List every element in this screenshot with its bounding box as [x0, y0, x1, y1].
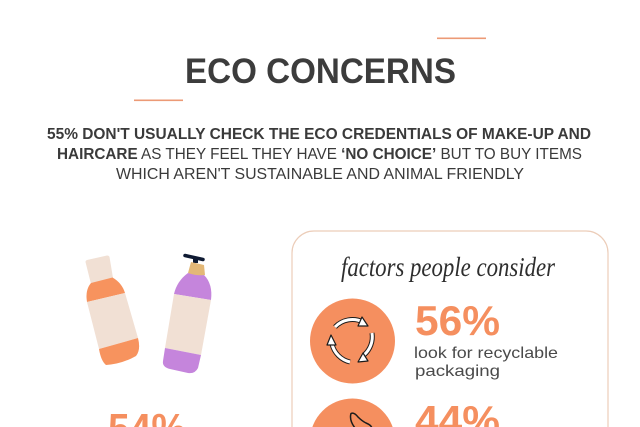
- icon: recycling arrows: [310, 298, 395, 384]
- label: recyclable packaging: packaging: [415, 363, 500, 380]
- panel: factors people consider: [292, 231, 608, 427]
- icon: purple pump bottle: [163, 256, 211, 373]
- label: recyclable packaging: look for recyclable: [414, 345, 558, 362]
- intro text block: HAIRCARE AS THEY FEEL THEY HAVE ‘NO CHOICE’ BUT TO BUY ITEMS: [57, 146, 582, 163]
- intro text block: 55% DON'T USUALLY CHECK THE ECO CREDENTIALS OF MAKE-UP AND: [47, 126, 591, 143]
- icon: animal ear in circle: [310, 398, 395, 427]
- intro text block: WHICH AREN'T SUSTAINABLE AND ANIMAL FRIENDLY: [116, 166, 524, 183]
- panel heading: factors people consider: [341, 252, 555, 282]
- label: recyclable packaging: [414, 345, 558, 380]
- title: ECO CONCERNS: [185, 52, 456, 91]
- statistic: 56%: 56%: [415, 297, 500, 344]
- icon: orange bottle: [86, 256, 139, 365]
- intro text block: [47, 126, 591, 183]
